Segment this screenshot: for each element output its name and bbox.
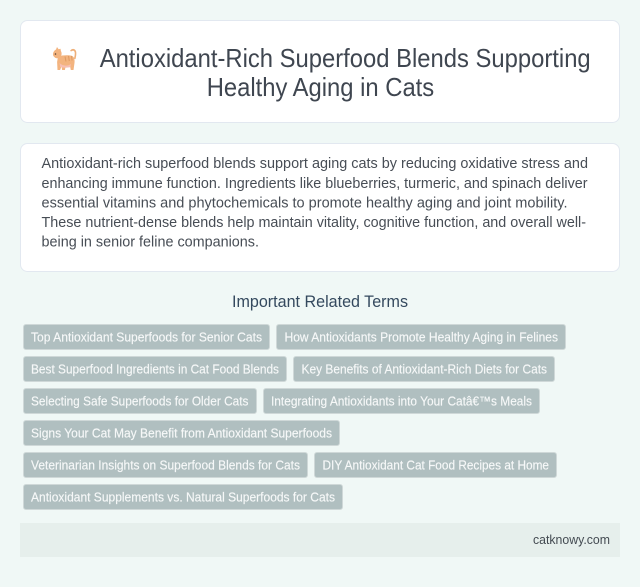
tag: DIY recipes xyxy=(314,452,556,478)
tag: best ingredients: Best Superfood Ingredients in Cat Food Blends xyxy=(31,362,279,376)
tag: selecting safe superfoods xyxy=(24,388,256,414)
tag: signs: Signs Your Cat May Benefit from Antioxidant Superfoods xyxy=(31,426,332,440)
tag: veterinarian insights: Veterinarian Insights on Superfood Blends for Cats xyxy=(31,458,300,472)
text block: description: Antioxidant-rich superfood blends support aging cats by reducing oxidative stress and xyxy=(42,155,588,172)
title xyxy=(100,45,591,102)
text block: description: being in senior feline companions. xyxy=(42,234,259,250)
panel: description xyxy=(20,144,620,272)
tag: best ingredients xyxy=(24,356,286,382)
tag: signs xyxy=(24,420,340,446)
text block: description xyxy=(42,155,588,250)
title: Healthy Aging in Cats xyxy=(207,74,434,102)
footer xyxy=(20,523,620,557)
tag: healthy aging xyxy=(276,324,566,350)
tag: DIY recipes: DIY Antioxidant Cat Food Recipes at Home xyxy=(322,458,549,472)
heading: related terms: Important Related Terms xyxy=(232,293,408,311)
panel: title card xyxy=(20,20,620,122)
footer source text: catknowy.com xyxy=(533,532,610,547)
related terms tags xyxy=(24,324,566,510)
text block: description: These nutrient-dense blends help maintain vitality, cognitive function, and overall well- xyxy=(42,214,586,231)
title: Antioxidant-Rich Superfood Blends Supporting xyxy=(100,45,591,73)
tag: key benefits xyxy=(294,356,554,382)
tag: top superfoods xyxy=(24,324,270,350)
icon: cat xyxy=(53,47,76,70)
tag: integrating antioxidants: Integrating Antioxidants into Your Catâ€™s Meals xyxy=(271,394,532,408)
tag: selecting safe superfoods: Selecting Safe Superfoods for Older Cats xyxy=(31,394,248,408)
tag: top superfoods: Top Antioxidant Superfoods for Senior Cats xyxy=(31,330,262,344)
tag: integrating antioxidants xyxy=(264,388,540,414)
text block: description: essential vitamins and phytochemicals to promote healthy aging and joint mobility. xyxy=(42,194,568,212)
tag: key benefits: Key Benefits of Antioxidant-Rich Diets for Cats xyxy=(302,362,547,376)
tag: veterinarian insights xyxy=(24,452,308,478)
text block: description: enhancing immune function. Ingredients like blueberries, turmeric, and spinach deliver xyxy=(42,175,588,192)
tag: supplements vs natural: Antioxidant Supplements vs. Natural Superfoods for Cats xyxy=(31,490,335,504)
tag: supplements vs natural xyxy=(24,484,342,510)
tag: healthy aging: How Antioxidants Promote Healthy Aging in Felines xyxy=(284,330,558,344)
